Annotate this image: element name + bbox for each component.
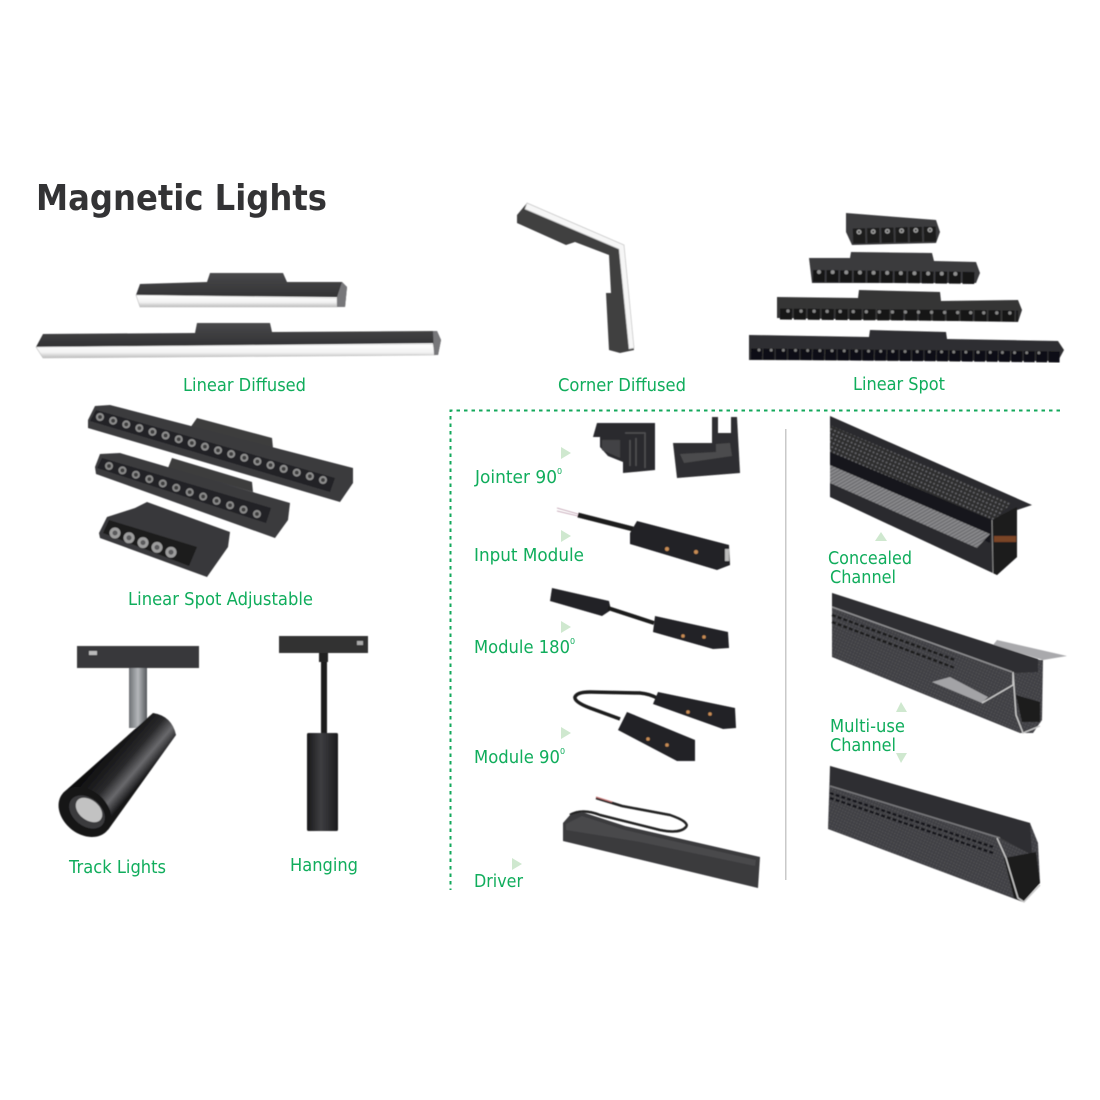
superscript: degree: 0: [560, 747, 565, 756]
label: concealed channel: Channel: [830, 567, 896, 588]
panel: concealed channel: [828, 416, 1032, 588]
icon: upright L jointer: [673, 417, 740, 478]
icon: module 90 connector: [575, 692, 736, 761]
accessories dashed border: [450, 410, 1060, 890]
label: module 180: Module 180: [474, 637, 570, 658]
icon: input module connector: [557, 508, 730, 570]
icon: driver unit: [563, 797, 760, 888]
icon: linear spot 18 head: [777, 290, 1022, 322]
icon: linear spot 6 head: [846, 213, 940, 245]
panel: linear diffused: [36, 273, 441, 396]
label: module 90: Module 90: [474, 747, 560, 768]
icon: linear spot 12 head: [809, 252, 980, 283]
icon: concealed channel profile: [830, 416, 1032, 575]
label: multi-use channel: Multi-use: [830, 716, 905, 737]
label: jointer 90: Jointer 90: [474, 467, 557, 488]
superscript: degree: 0: [570, 637, 575, 646]
icon: module 180 connector: [550, 588, 729, 649]
icon: linear spot 25 head: [749, 330, 1064, 361]
label: linear diffused: Linear Diffused: [183, 375, 306, 396]
arrow: multi-use up: [896, 702, 907, 712]
icon: adjustable 6 head: [99, 502, 230, 577]
arrow: jointer: [561, 447, 571, 459]
arrow: driver: [512, 858, 522, 870]
icon: long linear diffused light: [36, 323, 441, 358]
panel: driver: [474, 797, 760, 892]
panel: linear spot: [749, 213, 1064, 395]
icon: short linear diffused light: [136, 273, 347, 307]
vertical divider: [785, 429, 786, 880]
label: linear spot adjustable: Linear Spot Adjustable: [128, 589, 313, 610]
icon: track spotlight: [49, 646, 199, 847]
label: multi-use channel: Channel: [830, 735, 896, 756]
panel: linear spot adjustable: [88, 405, 353, 610]
icon: multi-use channel with wings: [832, 593, 1067, 733]
label: driver: Driver: [474, 871, 524, 892]
label: concealed channel: Concealed: [828, 548, 912, 569]
panel: jointer 90: [474, 417, 740, 488]
icon: adjustable 12 head: [95, 453, 290, 538]
arrow: input module: [561, 530, 571, 542]
panel: module 90: [474, 692, 736, 768]
panel: corner diffused: [517, 203, 686, 396]
panel: hanging: [279, 636, 368, 876]
superscript: degree: 0: [557, 467, 562, 476]
title: Magnetic Lights: [36, 178, 327, 219]
label: track lights: Track Lights: [68, 857, 166, 878]
panel: module 180: [474, 588, 729, 658]
panel: track lights: [49, 646, 199, 878]
panel: input module: [474, 508, 730, 570]
arrow: module 180: [561, 621, 571, 633]
arrow: module 90: [561, 727, 571, 739]
label: hanging: Hanging: [290, 855, 358, 876]
icon: corner diffused light: [517, 203, 634, 353]
label: linear spot: Linear Spot: [853, 374, 945, 395]
panel: multi-use channels: [828, 593, 1067, 902]
arrow: multi-use down: [896, 753, 907, 763]
icon: hanging pendant: [279, 636, 368, 831]
icon: flat L jointer: [593, 423, 655, 473]
label: input module: Input Module: [474, 545, 584, 566]
icon: adjustable 18 head: [88, 405, 353, 502]
icon: multi-use channel plain: [828, 766, 1040, 902]
label: corner diffused: Corner Diffused: [558, 375, 686, 396]
arrow: concealed channel: [875, 532, 887, 541]
